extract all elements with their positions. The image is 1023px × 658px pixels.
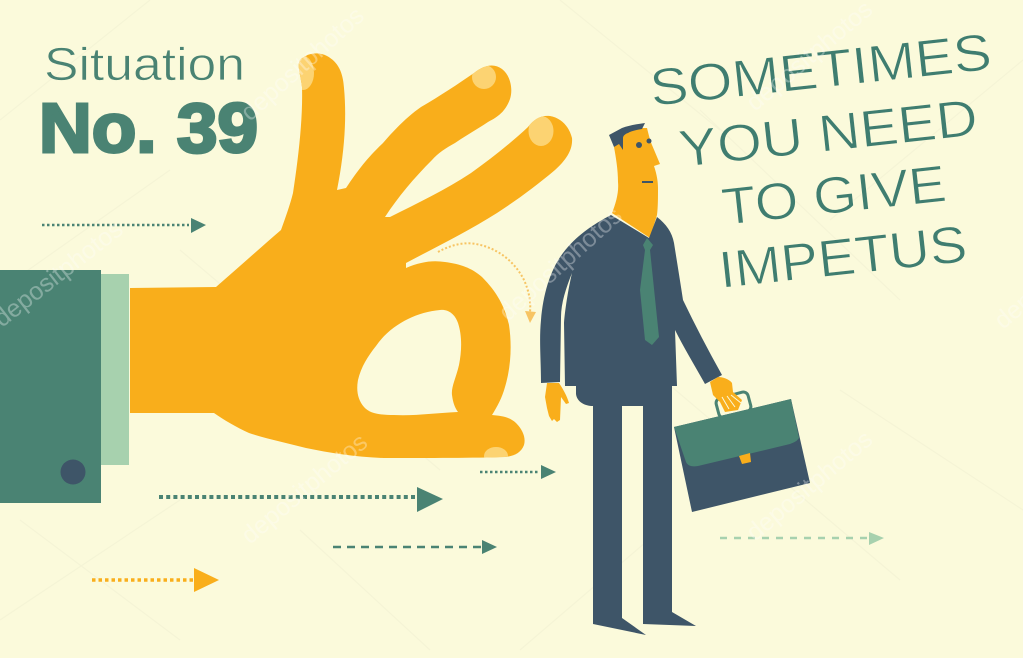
gap inside finger ring <box>357 310 461 415</box>
man: head and neck <box>612 128 660 238</box>
man: mouth <box>642 181 653 183</box>
arrow: upper dotted <box>42 218 206 233</box>
hand shape <box>130 53 572 458</box>
man: tie <box>640 238 659 345</box>
sleeve button <box>60 460 86 484</box>
businessman <box>540 123 810 635</box>
arrow: pale dashed <box>720 532 884 545</box>
fingernails <box>292 56 554 465</box>
man: right hand <box>710 377 742 412</box>
headline: sometimes you need to give impetus: YOU NEED <box>676 89 981 179</box>
man: briefcase handle <box>715 391 752 419</box>
man: left hand <box>545 383 569 422</box>
arrow: small dotted below thumb <box>480 465 556 479</box>
title: Situation No. 39 <box>39 38 258 167</box>
headline: sometimes you need to give impetus: TO GIVE <box>719 155 949 237</box>
headline: sometimes you need to give impetus: IMPETUS <box>716 215 970 300</box>
title: Situation No. 39: Situation <box>44 38 245 90</box>
man: briefcase <box>674 399 810 512</box>
man: hair <box>609 123 645 150</box>
sleeve <box>0 270 101 503</box>
watermark text: depositphotos <box>235 1 370 126</box>
arrow: orange dotted <box>92 568 219 592</box>
arrow: dashed <box>333 540 497 554</box>
watermark text: depositphotos <box>236 428 373 550</box>
arrow: curved flick <box>438 243 536 323</box>
man: legs <box>576 385 696 635</box>
headline: sometimes you need to give impetus: SOMETIMES <box>647 23 994 118</box>
hand with sleeve <box>0 53 572 503</box>
title: Situation No. 39: No. 39 <box>39 89 258 167</box>
watermark text: depositphotos <box>741 425 878 547</box>
sleeve cuff <box>101 274 129 465</box>
man: jacket <box>540 215 722 386</box>
arrow: thick dotted <box>159 487 443 512</box>
watermark text: depositphotos <box>493 201 628 326</box>
man: eyes <box>636 138 652 148</box>
headline: sometimes you need to give impetus <box>647 23 994 300</box>
